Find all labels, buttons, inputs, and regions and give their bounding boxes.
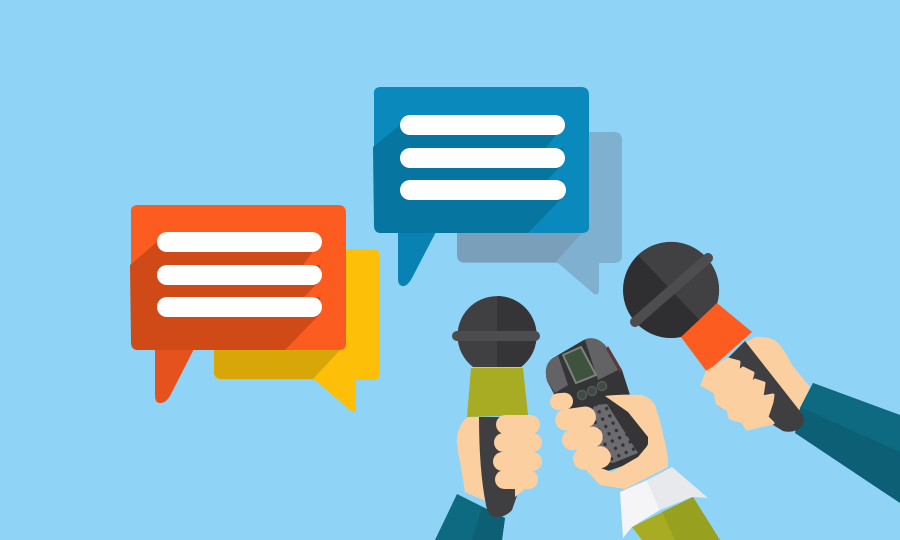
shirt sleeve <box>632 497 720 540</box>
orange speech bubble <box>130 205 346 403</box>
orange bubble long shadow <box>130 242 320 350</box>
recorder left grey strip <box>546 355 568 393</box>
right microphone with hand <box>623 242 900 503</box>
handheld recorder with hand <box>546 338 720 540</box>
left hand back <box>457 417 490 503</box>
left microphone head <box>458 296 536 367</box>
left microphone collar <box>467 368 528 417</box>
left sleeve <box>435 494 505 540</box>
left microphone with hand <box>435 296 542 540</box>
yellow speech bubble <box>214 249 380 412</box>
right microphone collar <box>681 303 752 372</box>
blue bubble long shadow <box>373 125 563 233</box>
recorder fingers <box>549 392 612 471</box>
orange bubble tail <box>155 345 196 403</box>
recorder body <box>546 338 650 472</box>
faded blue speech bubble <box>457 132 622 294</box>
blue bubble text lines <box>400 115 566 200</box>
right hand fingers <box>702 359 773 429</box>
blue bubble tail <box>398 228 438 286</box>
recorder right grey block <box>585 338 618 380</box>
right microphone head <box>623 242 719 338</box>
recorder red strip <box>606 346 622 373</box>
blue speech bubble <box>373 87 589 286</box>
right hand back <box>745 337 810 425</box>
shirt cuff <box>620 480 660 538</box>
right microphone handle <box>728 341 804 432</box>
recorder buttons <box>578 382 606 400</box>
recorder screen <box>563 347 596 383</box>
left microphone handle <box>479 417 520 517</box>
orange bubble text lines <box>157 232 322 317</box>
recorder palm <box>575 395 668 489</box>
recorder dotted grip <box>580 404 638 463</box>
right sleeve <box>795 383 900 503</box>
left hand fingers <box>493 415 542 497</box>
